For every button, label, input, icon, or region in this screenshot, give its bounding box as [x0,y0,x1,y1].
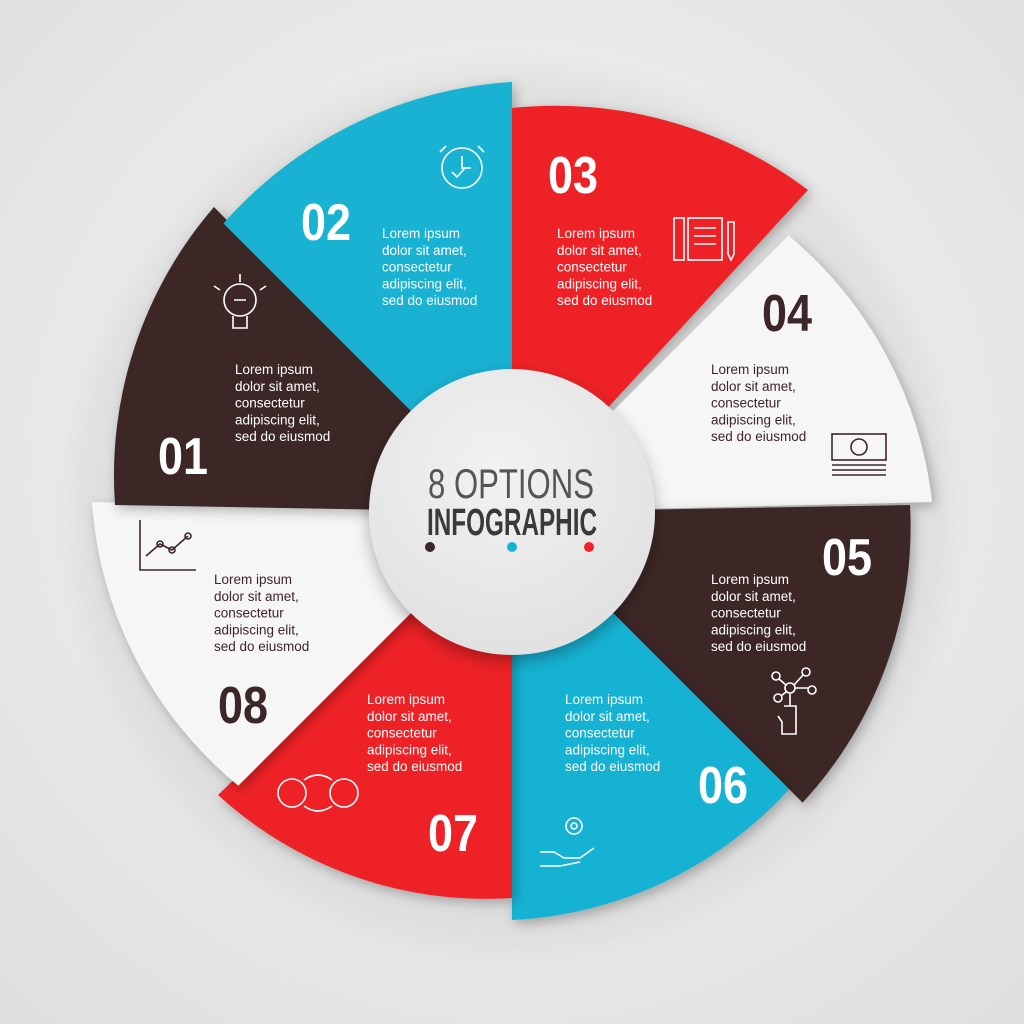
icon: bulb [214,274,266,328]
text blocks [214,226,806,774]
icon: money [832,434,886,475]
center circle [369,369,655,655]
text blocks: adipiscing elit, [382,276,467,291]
wedge 02 [224,82,512,512]
numbers: 05 [822,529,872,587]
text blocks: Lorem ipsum [557,226,635,241]
numbers: 06 [698,757,748,815]
text blocks: Lorem ipsum [367,692,445,707]
numbers: 08 [218,677,268,735]
icon: gear hand [540,818,594,866]
text blocks: dolor sit amet, [214,589,299,604]
text blocks: sed do eiusmod [367,759,462,774]
text blocks: adipiscing elit, [711,622,796,637]
text blocks: dolor sit amet, [711,589,796,604]
numbers: 01 [158,428,208,486]
text blocks: adipiscing elit, [557,276,642,291]
numbers: 07 [428,805,478,863]
text blocks: consectetur [711,606,781,621]
text blocks: sed do eiusmod [382,293,477,308]
icon: clock [440,146,484,188]
numbers: 03 [548,147,598,205]
text blocks: adipiscing elit, [235,412,320,427]
text blocks: adipiscing elit, [565,742,650,757]
wedge 07 [218,512,512,899]
text blocks: dolor sit amet, [382,243,467,258]
icon: chart [140,520,196,570]
title: 8 OPTIONS [428,460,594,507]
text blocks: Lorem ipsum [382,226,460,241]
text blocks: adipiscing elit, [711,412,796,427]
text blocks: sed do eiusmod [711,639,806,654]
wedge 06 [512,512,789,920]
text blocks: consectetur [367,726,437,741]
wedge 05 [512,505,911,803]
text blocks: adipiscing elit, [214,622,299,637]
text blocks: Lorem ipsum [711,572,789,587]
text blocks: dolor sit amet, [565,709,650,724]
wedge 01 [114,207,512,512]
text blocks: dolor sit amet, [367,709,452,724]
text blocks: consectetur [711,396,781,411]
text blocks: sed do eiusmod [235,429,330,444]
text blocks: consectetur [557,260,627,275]
icon: network hand [772,668,816,734]
text blocks: consectetur [235,396,305,411]
wedge 08 [92,502,512,786]
background shadow circle [72,72,952,952]
text blocks: consectetur [214,606,284,621]
text blocks: sed do eiusmod [711,429,806,444]
text blocks: dolor sit amet, [235,379,320,394]
numbers: 04 [762,285,812,343]
text blocks: dolor sit amet, [557,243,642,258]
dots [425,542,435,552]
text blocks: consectetur [382,260,452,275]
icons [140,146,886,866]
icon: heads [278,775,358,811]
redraw 02 over 01 [224,82,512,512]
text blocks: adipiscing elit, [367,742,452,757]
numbers: 02 [301,194,351,252]
text blocks: consectetur [565,726,635,741]
center circle: INFOGRAPHIC [427,502,597,544]
numbers [158,147,872,863]
text blocks: sed do eiusmod [557,293,652,308]
text blocks: sed do eiusmod [214,639,309,654]
icon: notes [674,218,734,260]
text blocks: Lorem ipsum [214,572,292,587]
text blocks: Lorem ipsum [711,362,789,377]
text blocks: dolor sit amet, [711,379,796,394]
wedge 03 [512,106,808,512]
text blocks: sed do eiusmod [565,759,660,774]
text blocks: Lorem ipsum [235,362,313,377]
text blocks: Lorem ipsum [565,692,643,707]
wedge 04 [512,236,932,512]
